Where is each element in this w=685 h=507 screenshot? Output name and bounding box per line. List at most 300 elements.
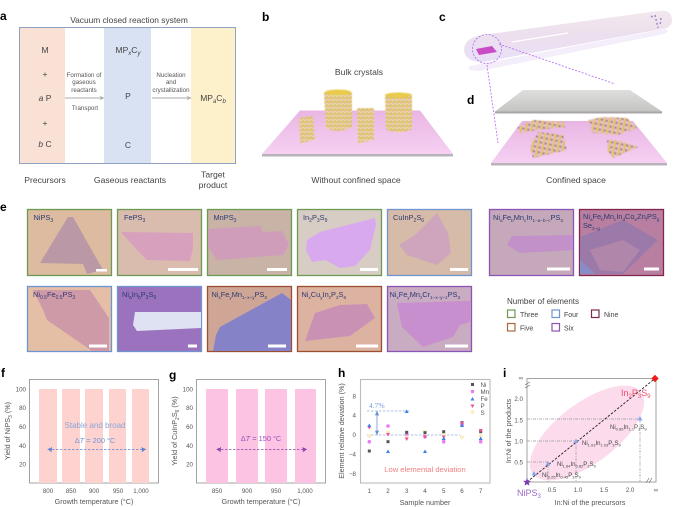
image: MnPS3: MnPS — [214, 213, 234, 222]
legend: S — [480, 410, 485, 417]
x axis ticks: 850 — [66, 488, 77, 495]
composition labels: S — [575, 473, 579, 479]
image: NiCuInP2S6: 2 — [336, 295, 339, 300]
label d: d — [467, 93, 474, 107]
x axis ticks: 950 — [113, 488, 124, 495]
panel a: reaction system schematic — [0, 9, 236, 190]
yield bars — [206, 389, 316, 483]
x axis ticks: 1,000 — [297, 488, 313, 495]
tube highlight — [512, 33, 568, 42]
composition labels: 0.25 — [548, 474, 556, 480]
x axis title: Sample number — [400, 498, 451, 507]
image: CuInP2S6 — [388, 210, 472, 276]
x axis title: Growth temperature (°C) — [55, 497, 133, 506]
arrow: formation and transport: Formation of — [67, 72, 102, 79]
precursor formula text: + — [43, 118, 48, 128]
gaseous reactant formula text: P — [125, 91, 131, 101]
composition labels: 9 — [644, 426, 647, 432]
precursor formula text: a P — [39, 93, 52, 103]
composition labels: 1.03 — [588, 442, 596, 448]
plot frame — [30, 380, 158, 483]
quartz tube — [464, 10, 672, 62]
y axis ticks: 8 — [353, 394, 357, 400]
crystal stacks — [299, 90, 412, 143]
image: NiCuInP2S6: Cu — [311, 290, 320, 299]
composition labels: Ni — [542, 473, 548, 479]
image: NiFeMnCr: y — [407, 295, 410, 300]
image: NiFeMn: Fe — [221, 290, 229, 299]
target product formula: C — [216, 93, 222, 103]
y axis ticks: 80 — [186, 405, 194, 412]
image: six-element flake: c — [524, 218, 527, 223]
gaseous reactant formula text: MP — [116, 45, 128, 55]
In2P3S9 endpoint: 3 — [638, 394, 642, 400]
x axis ticks: 800 — [43, 488, 54, 495]
image: six-element flake: Mn — [514, 213, 524, 222]
y axis ticks: 2.0 — [514, 396, 524, 403]
panel f: NiPS3 yield chart — [1, 366, 158, 506]
image: Ni0.5Fe0.5PS3: 0.5 — [56, 295, 63, 301]
image: six-element flake: PS — [550, 213, 560, 222]
x axis ticks: 0.5 — [548, 487, 557, 494]
image: six-element flake: 3 — [560, 218, 563, 223]
NiPS3 endpoint: NiPS — [517, 488, 538, 498]
image: CuInP2S6: 2 — [414, 218, 417, 224]
composition labels: 3 — [587, 464, 590, 468]
image: nine-element flake: a — [590, 217, 593, 222]
plot frame — [360, 380, 490, 483]
image: nine-element flake: g — [657, 217, 660, 222]
image: NiFeMn: y — [229, 295, 232, 300]
panel g: CuInP2S6 yield chart — [169, 368, 326, 506]
image: NiInP3S9: a — [129, 295, 132, 301]
image: NiFeMn: PS — [254, 290, 264, 299]
image: nine-element flake: b — [601, 217, 604, 222]
annotation: ΔT = 150 °C — [241, 434, 282, 443]
arrow: formation and transport: Transport — [72, 105, 98, 112]
image: CuInP2S6: S — [416, 213, 421, 222]
x axis ticks: 900 — [242, 488, 253, 495]
image: NiFeMnCr: z — [420, 295, 423, 300]
image: In2P3S9: 2 — [309, 218, 312, 224]
image: nine-element flake: e — [634, 217, 638, 222]
column caption: gaseous reactants: Gaseous reactants — [94, 175, 166, 185]
composition labels: 9 — [579, 474, 582, 480]
composition labels: Ni — [582, 441, 588, 447]
pink ellipse — [515, 368, 659, 498]
image: NiFeMn: x — [218, 295, 221, 300]
image: nine-element flake: f — [646, 217, 648, 222]
precursor formula text — [38, 45, 52, 149]
composition labels: Ni — [610, 425, 616, 431]
x axis ticks — [368, 488, 483, 495]
image: NiFeMn: Ni — [212, 290, 218, 299]
image: six-element flake: 1−a−b−c — [532, 218, 551, 223]
y axis ticks: 100 — [183, 386, 194, 394]
image: CuInP2S6: CuInP — [393, 213, 414, 222]
x axis ticks — [43, 488, 149, 495]
label c: c — [439, 10, 446, 24]
image: In2P3S9: 3 — [317, 218, 320, 224]
x axis ticks: 900 — [89, 488, 100, 495]
y axis ticks: 0 — [353, 432, 357, 439]
arrow: nucleation and crystallization: Nucleation — [156, 72, 186, 79]
image: CuInP2S6: 6 — [421, 218, 424, 224]
y axis title: 6 — [175, 409, 181, 412]
axis titles: In:Ni of the precursors — [555, 498, 626, 507]
composition labels: 0.82 — [575, 464, 584, 468]
image: NiInP3S9: b — [138, 295, 141, 301]
image: NiInP3S9: 3 — [146, 295, 149, 301]
image: NiCuInP2S6 — [298, 286, 382, 352]
y axis ticks — [16, 386, 27, 468]
image: NiFeMn: 3 — [264, 295, 267, 300]
annotation: low elemental deviation: Low elemental deviation — [384, 465, 466, 474]
image: NiFeMn: 1−x−y — [242, 295, 255, 300]
image: NiCuInP2S6: x — [308, 295, 311, 300]
plot frame — [527, 378, 656, 482]
composition labels — [542, 425, 647, 480]
heading: vacuum closed reaction system: Vacuum closed reaction system — [70, 15, 188, 25]
x axis ticks: 2 — [386, 488, 390, 495]
legend: Mn — [480, 389, 490, 396]
annotation: ΔT = 200 °C — [75, 436, 116, 445]
magenta substrate — [476, 46, 497, 55]
composition labels: P — [568, 473, 572, 479]
y axis ticks — [183, 386, 194, 468]
y axis title: S — [170, 412, 179, 417]
x axis ticks: 1.0 — [574, 487, 583, 494]
composition labels: Ni — [557, 462, 563, 468]
composition labels: 9 — [619, 442, 622, 448]
composition labels: S — [615, 441, 619, 447]
column caption: precursors: Precursors — [24, 175, 66, 185]
x axis ticks: 2.0 — [626, 487, 635, 494]
arrow: formation and transport: reactants — [71, 87, 97, 94]
precursor formula text: + — [43, 69, 48, 79]
In2P3S9 endpoint: In — [621, 388, 629, 398]
yield bars — [39, 389, 149, 483]
image: NiCuInP2S6: P — [331, 290, 336, 299]
label h: h — [338, 366, 345, 380]
image: NiInP3S9: P — [141, 290, 146, 299]
panel d: confined space — [467, 90, 667, 185]
image: In2P3S9: S — [320, 213, 325, 222]
image: NiCuInP2S6: y — [320, 295, 323, 300]
composition labels: 3 — [612, 442, 615, 448]
y axis ticks: 1.0 — [514, 438, 524, 446]
y axis ticks: 80 — [19, 405, 27, 412]
NiPS3 endpoint: 3 — [538, 494, 542, 500]
axis break marks — [525, 382, 652, 483]
label f: f — [1, 366, 6, 380]
panel i: composition control chart — [503, 366, 659, 507]
NiPS3 endpoint — [517, 478, 542, 500]
precursor formula text: M — [41, 45, 49, 55]
system frame — [20, 28, 236, 164]
composition labels: 1.64 — [563, 464, 571, 468]
gaseous reactant formula text: x — [127, 51, 132, 57]
image: NiFeMnCr — [388, 286, 472, 352]
image: Ni0.5Fe0.5PS3: 0.5 — [40, 295, 47, 301]
image: NiFeMnCr: Ni — [390, 290, 396, 299]
image: NiCuInP2S6: S — [338, 290, 344, 299]
x axis ticks: 4 — [423, 488, 427, 495]
x axis ticks — [212, 488, 313, 495]
column caption: target product: product — [199, 180, 228, 190]
composition labels: 3 — [572, 474, 575, 480]
diagonal dashed line — [527, 378, 655, 482]
image: Ni0.5Fe0.5PS3 — [28, 286, 112, 352]
precursor formula text: b C — [38, 139, 52, 149]
image: FePS3: FePS — [124, 213, 142, 222]
In2P3S9 endpoint: P — [632, 388, 638, 398]
x axis ticks: 850 — [212, 488, 223, 495]
double arrow — [217, 448, 306, 452]
In2P3S9 endpoint: 2 — [629, 394, 633, 400]
precursor atoms — [651, 15, 661, 28]
composition labels: 1.1 — [628, 426, 635, 432]
image: nine-element flake: Zn — [637, 212, 646, 221]
image: NiInP3S9: In — [132, 290, 138, 299]
4.7% arrow — [376, 412, 378, 434]
x axis ticks: 950 — [271, 488, 282, 495]
image: Ni0.5Fe0.5PS3: PS — [63, 290, 72, 299]
label b: b — [262, 10, 269, 24]
composition labels: S — [640, 425, 644, 431]
composition labels: 1.03 — [600, 442, 609, 448]
label i: i — [503, 366, 506, 380]
image: NiCuInP2S6: z — [329, 295, 332, 300]
plot frame — [196, 380, 326, 483]
composition labels: 0.85 — [616, 426, 624, 432]
image: NiInP3S9 — [118, 286, 202, 352]
image: NiFeMnCr: Cr — [422, 290, 431, 299]
y axis ticks: 40 — [186, 443, 194, 450]
arrow: formation and transport: gaseous — [72, 79, 96, 86]
x axis ticks: 1 — [368, 488, 372, 495]
annotation: Stable and broad — [65, 421, 125, 430]
precursors column — [19, 27, 65, 164]
image: In2P3S9 — [298, 210, 382, 276]
y axis title: (%) — [3, 402, 12, 415]
x axis ticks: 1.5 — [600, 487, 609, 494]
axis titles — [504, 398, 626, 507]
image: nine-element flake: c — [614, 217, 617, 222]
guide lines — [527, 419, 640, 482]
y axis title: 3 — [8, 415, 14, 418]
y axis ticks: 20 — [19, 462, 27, 468]
image: nine-element flake: 3−g — [592, 226, 600, 231]
y axis ticks: 20 — [186, 462, 194, 468]
scatter: P — [367, 422, 483, 441]
image: FePS3 — [118, 210, 202, 276]
image: six-element flake: In — [526, 213, 532, 222]
image: NiFeMnCr: x — [396, 295, 399, 300]
y axis ticks: 4 — [353, 412, 357, 420]
y axis title: (%) — [170, 396, 179, 410]
x axis title: Growth temperature (°C) — [222, 497, 300, 506]
image: nine-element flake — [580, 210, 664, 276]
y axis ticks: ∞ — [519, 375, 523, 382]
image: nine-element flake: Ni — [583, 212, 590, 221]
image: NiCuInP2S6: In — [323, 290, 329, 299]
x axis ticks: 3 — [405, 488, 409, 495]
column caption: target product — [199, 170, 228, 190]
reference lines — [367, 411, 460, 435]
y axis title: Yield of CuInP — [170, 420, 179, 466]
tube shadow — [468, 29, 668, 71]
y axis ticks: 100 — [16, 386, 27, 394]
y axis title: Yield of NiPS — [3, 418, 12, 460]
panel c: quartz tube — [439, 10, 672, 143]
y axis ticks: −8 — [349, 471, 357, 478]
y axis ticks: 40 — [19, 443, 27, 450]
gaseous reactants column — [104, 27, 151, 164]
composition labels: 9 — [594, 464, 597, 468]
arrow: nucleation and crystallization: and — [166, 79, 177, 86]
composition labels: In — [623, 425, 628, 431]
image: In2P3S9: P — [312, 213, 317, 222]
In2P3S9 endpoint — [621, 376, 658, 400]
x axis ticks: ∞ — [654, 487, 658, 494]
confined flakes — [517, 117, 638, 158]
composition labels: In — [570, 462, 575, 468]
legend: P — [480, 403, 485, 410]
image: In2P3S9: In — [303, 213, 309, 222]
image: six-element flake: Ni — [493, 213, 500, 222]
y axis ticks — [514, 375, 524, 466]
image: NiFeMnCr: PS — [448, 290, 458, 299]
image: NiFeMn — [208, 286, 292, 352]
double arrow — [48, 448, 146, 452]
legend: number of elements: Nine — [604, 312, 619, 319]
scatter: S — [367, 430, 483, 439]
axis titles: In:Ni of the products — [504, 398, 513, 463]
column caption: target product: Target — [201, 170, 226, 180]
zoom circle and dashed leaders — [472, 34, 615, 143]
composition labels: In — [555, 473, 560, 479]
x axis ticks: 7 — [479, 488, 483, 495]
image: NiFeMnCr: 3 — [457, 295, 460, 300]
image: NiFeMn: Mn — [232, 290, 242, 299]
image: nine-element flake: d — [622, 217, 625, 222]
legend: number of elements — [507, 297, 619, 332]
image: six-element flake: a — [500, 218, 503, 223]
image: nine-element flake: Se — [583, 221, 592, 230]
arrow: nucleation and crystallization: crystallization — [152, 87, 190, 94]
triangle data points — [532, 416, 642, 476]
legend: Ni — [480, 382, 486, 389]
panel h: element deviation chart — [337, 366, 490, 507]
image: NiInP3S9: 9 — [153, 295, 156, 301]
y axis ticks: −4 — [349, 452, 357, 458]
legend: number of elements: Number of elements — [507, 297, 579, 306]
target product formula: b — [222, 99, 226, 105]
composition labels: P — [634, 425, 638, 431]
gaseous reactant formula text: C — [125, 140, 131, 150]
legend: number of elements: Three — [520, 312, 538, 319]
panel e: optical microscopy images — [0, 200, 664, 352]
y axis ticks: 1.5 — [514, 418, 524, 424]
arrow: formation and transport — [65, 72, 104, 112]
panel b: without confined space — [262, 10, 453, 185]
In2P3S9 endpoint: S — [641, 388, 647, 398]
image: MnPS3 — [208, 210, 292, 276]
label e: e — [0, 200, 7, 214]
composition labels: S — [590, 462, 594, 468]
grey cover plate — [495, 90, 662, 114]
y axis ticks — [349, 394, 357, 478]
image: NiFeMnCr: Mn — [410, 290, 420, 299]
scatter: Mn — [368, 423, 483, 444]
image: six-element flake: Fe — [503, 213, 511, 222]
y axis ticks: 60 — [186, 424, 194, 431]
x axis ticks: 6 — [460, 488, 464, 495]
legend: Fe — [480, 396, 488, 403]
image: NiCuInP2S6: 6 — [343, 295, 346, 300]
caption: without confined space: Without confined space — [311, 175, 401, 185]
image: nine-element flake: PS — [647, 212, 657, 221]
caption: confined space: Confined space — [546, 175, 606, 185]
image: In2P3S9: 9 — [325, 218, 328, 224]
caption: bulk crystals: Bulk crystals — [335, 67, 383, 77]
y axis ticks: 60 — [19, 424, 27, 431]
image: six-element flake: b — [511, 218, 514, 223]
target product formula: a — [213, 99, 217, 105]
image: Ni0.5Fe0.5PS3: Fe — [47, 290, 56, 299]
label a: a — [0, 9, 7, 23]
scatter: Ni — [368, 421, 482, 452]
image: Ni0.5Fe0.5PS3: Ni — [33, 290, 40, 299]
annotation — [65, 421, 125, 445]
composition labels: In — [595, 441, 600, 447]
gaseous reactant formula text: C — [131, 45, 137, 55]
image: FePS3: 3 — [142, 218, 145, 224]
gaseous reactant formula text — [116, 45, 141, 150]
composition labels: P — [608, 441, 612, 447]
x axis ticks — [548, 487, 658, 494]
image: nine-element flake: Fe — [593, 212, 601, 221]
image: six-element flake — [490, 210, 574, 276]
image: NiInP3S9: Ni — [122, 290, 129, 299]
y axis title: Element relative deviation (%) — [337, 383, 346, 479]
image: NiPS3: NiPS — [34, 213, 50, 222]
composition labels: 3 — [638, 426, 641, 432]
y axis title: 2 — [175, 417, 181, 420]
image: Ni0.5Fe0.5PS3: 3 — [72, 295, 75, 301]
arrow: nucleation and crystallization — [152, 72, 190, 100]
image: nine-element flake: Co — [625, 212, 634, 221]
image: NiCuInP2S6: Ni — [302, 290, 308, 299]
pink substrate plate — [491, 121, 667, 166]
image: NiFeMnCr: Fe — [399, 290, 407, 299]
scatter: Fe — [367, 410, 483, 453]
gaseous reactant formula text: y — [136, 51, 141, 57]
In2P3S9 endpoint: 9 — [647, 394, 651, 400]
image: MnPS3: 3 — [234, 218, 237, 224]
target product formula: MP — [200, 93, 213, 103]
4.7% label: 4.7% — [369, 401, 385, 410]
image: NiPS3 — [28, 210, 112, 276]
target product column — [191, 27, 236, 164]
image: NiFeMnCr: 1−x−y−z — [430, 295, 448, 300]
label g: g — [169, 368, 176, 382]
image: nine-element flake: Mn — [604, 212, 614, 221]
legend: number of elements: Five — [520, 326, 533, 332]
composition labels: 0.45 — [560, 474, 569, 480]
legend — [470, 382, 490, 417]
